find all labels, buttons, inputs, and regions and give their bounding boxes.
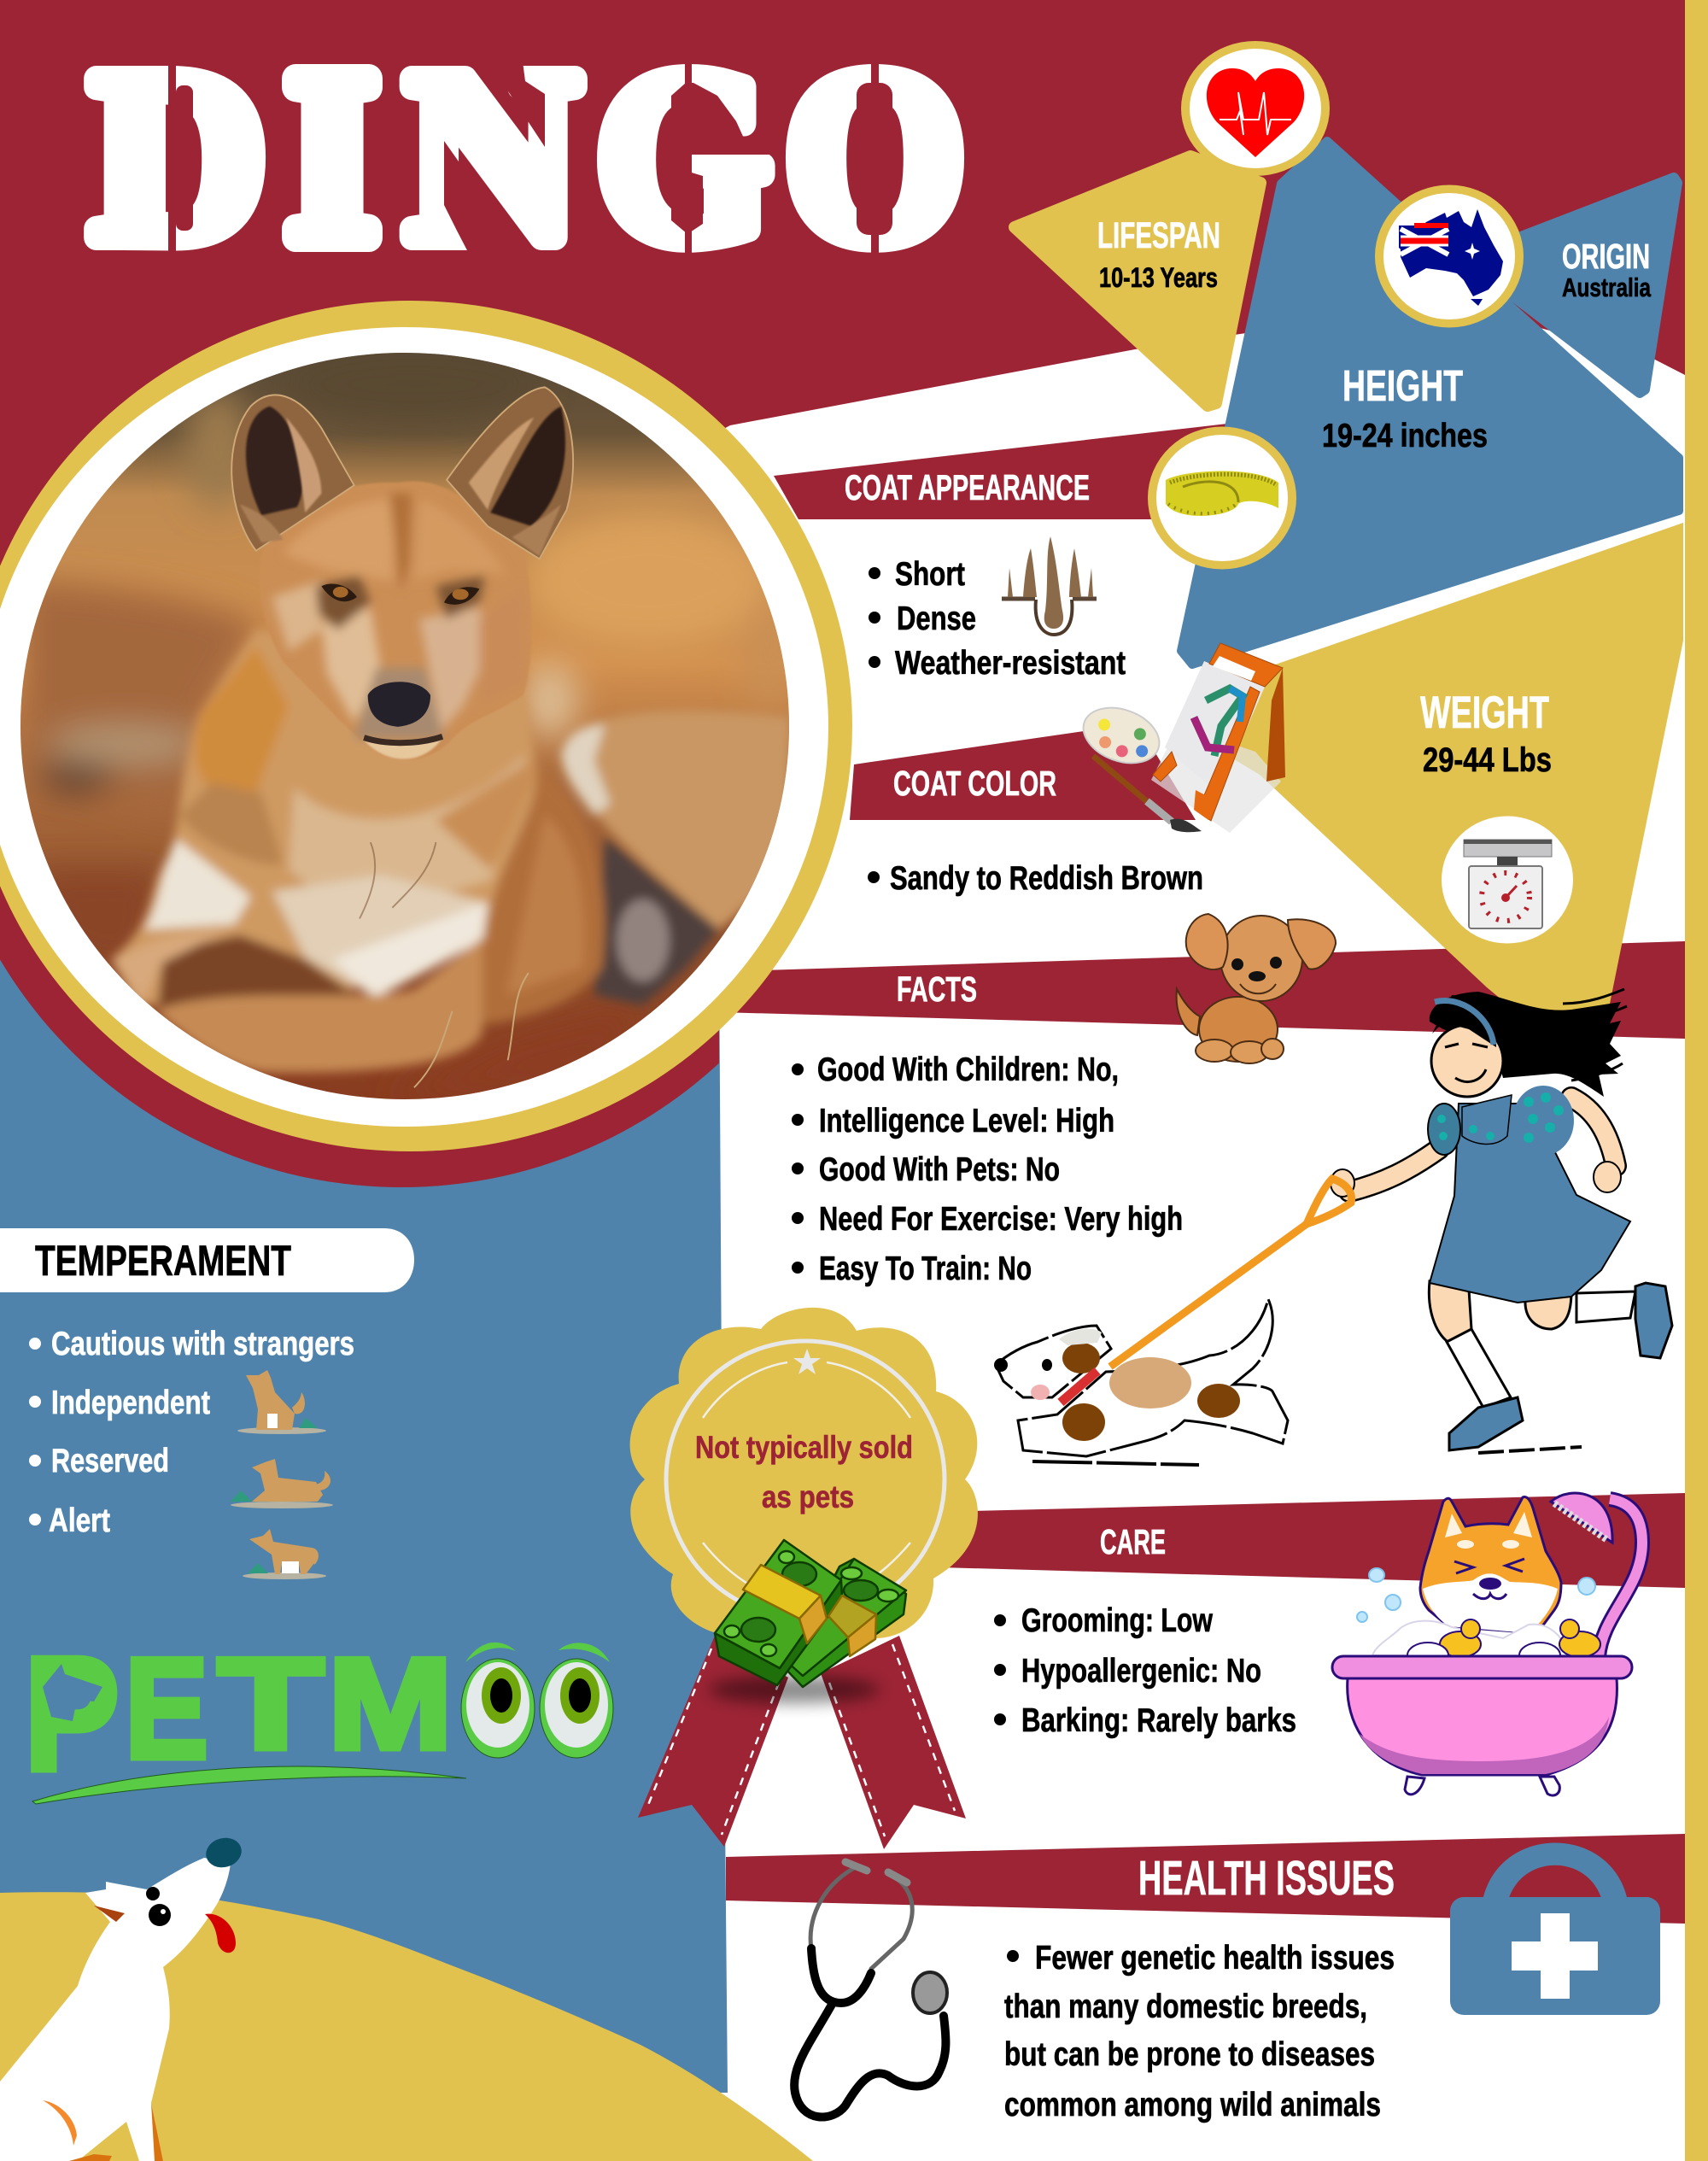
face [1431, 1025, 1503, 1097]
panel: weight triangle: WEIGHT [1420, 688, 1549, 738]
panel: temperament [0, 1228, 414, 1539]
coat appearance list: Short [895, 556, 965, 593]
legs [1429, 1281, 1471, 1343]
logo: PETMOO: E [125, 1628, 208, 1789]
panel: temperament: TEMPERAMENT [35, 1237, 291, 1285]
icon: heart circle [1181, 41, 1330, 176]
facts list: Good With Children: No, [817, 1051, 1119, 1088]
gold hill [0, 1892, 813, 2161]
facts list: Intelligence Level: High [819, 1103, 1114, 1139]
arms [1349, 1149, 1439, 1192]
paws [1407, 1643, 1448, 1668]
logo: PETMOO: M [328, 1631, 453, 1777]
illustration: girl running [1331, 989, 1672, 1453]
panel: temperament: Alert [49, 1502, 110, 1539]
panel: lifespan triangle: 10-13 Years [1099, 262, 1218, 293]
nose [368, 682, 430, 727]
blurred body base [112, 630, 790, 1073]
panel: height triangle [1181, 141, 1679, 665]
logo: PETMOO [24, 1624, 613, 1805]
right gold strip [1685, 0, 1708, 2161]
icon: weight scale [1442, 817, 1573, 943]
coat color header [850, 731, 1196, 820]
illustration: leash [1110, 1179, 1352, 1367]
health issues text: than many domestic breeds, [1004, 1988, 1367, 2025]
panel: origin triangle: Australia [1562, 272, 1652, 302]
illustration: running dog [994, 1299, 1288, 1465]
scalloped seal [630, 1308, 978, 1638]
icon: lying dog [231, 1459, 333, 1508]
facts header [719, 941, 1685, 1039]
logo: PETMOO: P [24, 1624, 120, 1805]
badge: not typically sold as pets [630, 1308, 978, 1849]
panel: blue left background [0, 940, 728, 2093]
icon: puppy [1177, 914, 1336, 1063]
ducks [1440, 1631, 1481, 1657]
care list: Grooming: Low [1021, 1602, 1214, 1639]
dress [1430, 1104, 1630, 1303]
shower [1599, 1499, 1642, 1657]
icon: hair follicle [1002, 536, 1097, 635]
icon: money stacks [709, 1540, 906, 1703]
illustration: shiba in bathtub [1332, 1493, 1642, 1795]
care list: Barking: Rarely barks [1021, 1702, 1296, 1739]
icon: stethoscope [794, 1862, 947, 2117]
care list [994, 1602, 1296, 1739]
icon: easel and palette [1076, 643, 1285, 833]
logo: PETMOO: T [218, 1631, 324, 1777]
title: DINGO: N [407, 22, 578, 290]
icon: standing dog [243, 1529, 326, 1579]
panel: height triangle: 19-24 inches [1322, 418, 1488, 454]
facts header: FACTS [897, 969, 977, 1009]
eyes [321, 584, 357, 601]
ribbon left [638, 1636, 788, 1847]
icon: first aid kit [1450, 1843, 1660, 2015]
health issues header: HEALTH ISSUES [1138, 1851, 1395, 1906]
title: DINGO [92, 22, 963, 290]
icon: tape measure circle [1148, 427, 1296, 569]
panel: weight triangle [1221, 523, 1683, 1029]
facts list [792, 1051, 1183, 1287]
foam [1372, 1621, 1571, 1655]
mouth [362, 738, 442, 759]
title: DINGO: O [787, 22, 963, 290]
health issues text: but can be prone to diseases [1004, 2036, 1375, 2073]
title: DINGO: D [92, 22, 265, 290]
panel: height triangle: HEIGHT [1342, 361, 1463, 410]
ears [231, 395, 354, 551]
background crimson top area [0, 0, 1685, 940]
panel: lifespan triangle: LIFESPAN [1097, 215, 1220, 256]
care header [939, 1493, 1685, 1588]
health issues text: Fewer genetic health issues [1035, 1940, 1395, 1977]
coat appearance header [774, 424, 1227, 519]
health issues text [1004, 1940, 1395, 2123]
facts list: Good With Pets: No [819, 1151, 1060, 1188]
title: DINGO: G [598, 22, 769, 290]
coat color list: Sandy to Reddish Brown [890, 860, 1203, 897]
feet [1405, 1777, 1424, 1795]
crimson lower ring [0, 940, 719, 1187]
panel: origin triangle: ORIGIN [1562, 237, 1650, 276]
tub body [1348, 1678, 1617, 1775]
health issues header [726, 1834, 1685, 1924]
ribbon right [821, 1636, 966, 1849]
panel: weight triangle: 29-44 Lbs [1423, 741, 1552, 779]
care header: CARE [1100, 1522, 1166, 1561]
health issues text: common among wild animals [1004, 2087, 1381, 2123]
white ring [0, 327, 828, 1127]
hair [1430, 992, 1621, 1097]
panel: origin triangle [1513, 178, 1677, 393]
facts list: Need For Exercise: Very high [819, 1201, 1183, 1238]
title: DINGO: I [288, 22, 377, 290]
illustration: white dog looking up [0, 1834, 245, 2161]
panel: temperament: Independent [51, 1385, 210, 1421]
icon: australia map circle [1375, 184, 1524, 328]
gold ring [0, 301, 852, 1151]
dingo photo [0, 342, 811, 1110]
coat appearance list [869, 556, 1126, 682]
coat appearance list: Dense [897, 600, 976, 637]
facts list: Easy To Train: No [819, 1250, 1032, 1287]
coat appearance list: Weather-resistant [895, 645, 1126, 682]
badge: not typically sold as pets: Not typically sold [695, 1430, 913, 1465]
panel: temperament: Cautious with strangers [51, 1326, 354, 1362]
coat appearance header: COAT APPEARANCE [845, 467, 1090, 507]
panel: temperament: Reserved [51, 1443, 169, 1479]
sleeves [1428, 1104, 1460, 1155]
head [1420, 1497, 1561, 1633]
fur strokes [360, 842, 436, 918]
care list: Hypoallergenic: No [1021, 1653, 1261, 1690]
panel: lifespan triangle [1015, 156, 1261, 406]
badge: not typically sold as pets: as pets [762, 1479, 854, 1514]
coat color header: COAT COLOR [893, 764, 1056, 803]
icon: sitting dog [237, 1370, 326, 1434]
bubbles [1357, 1568, 1595, 1622]
head [260, 482, 531, 760]
